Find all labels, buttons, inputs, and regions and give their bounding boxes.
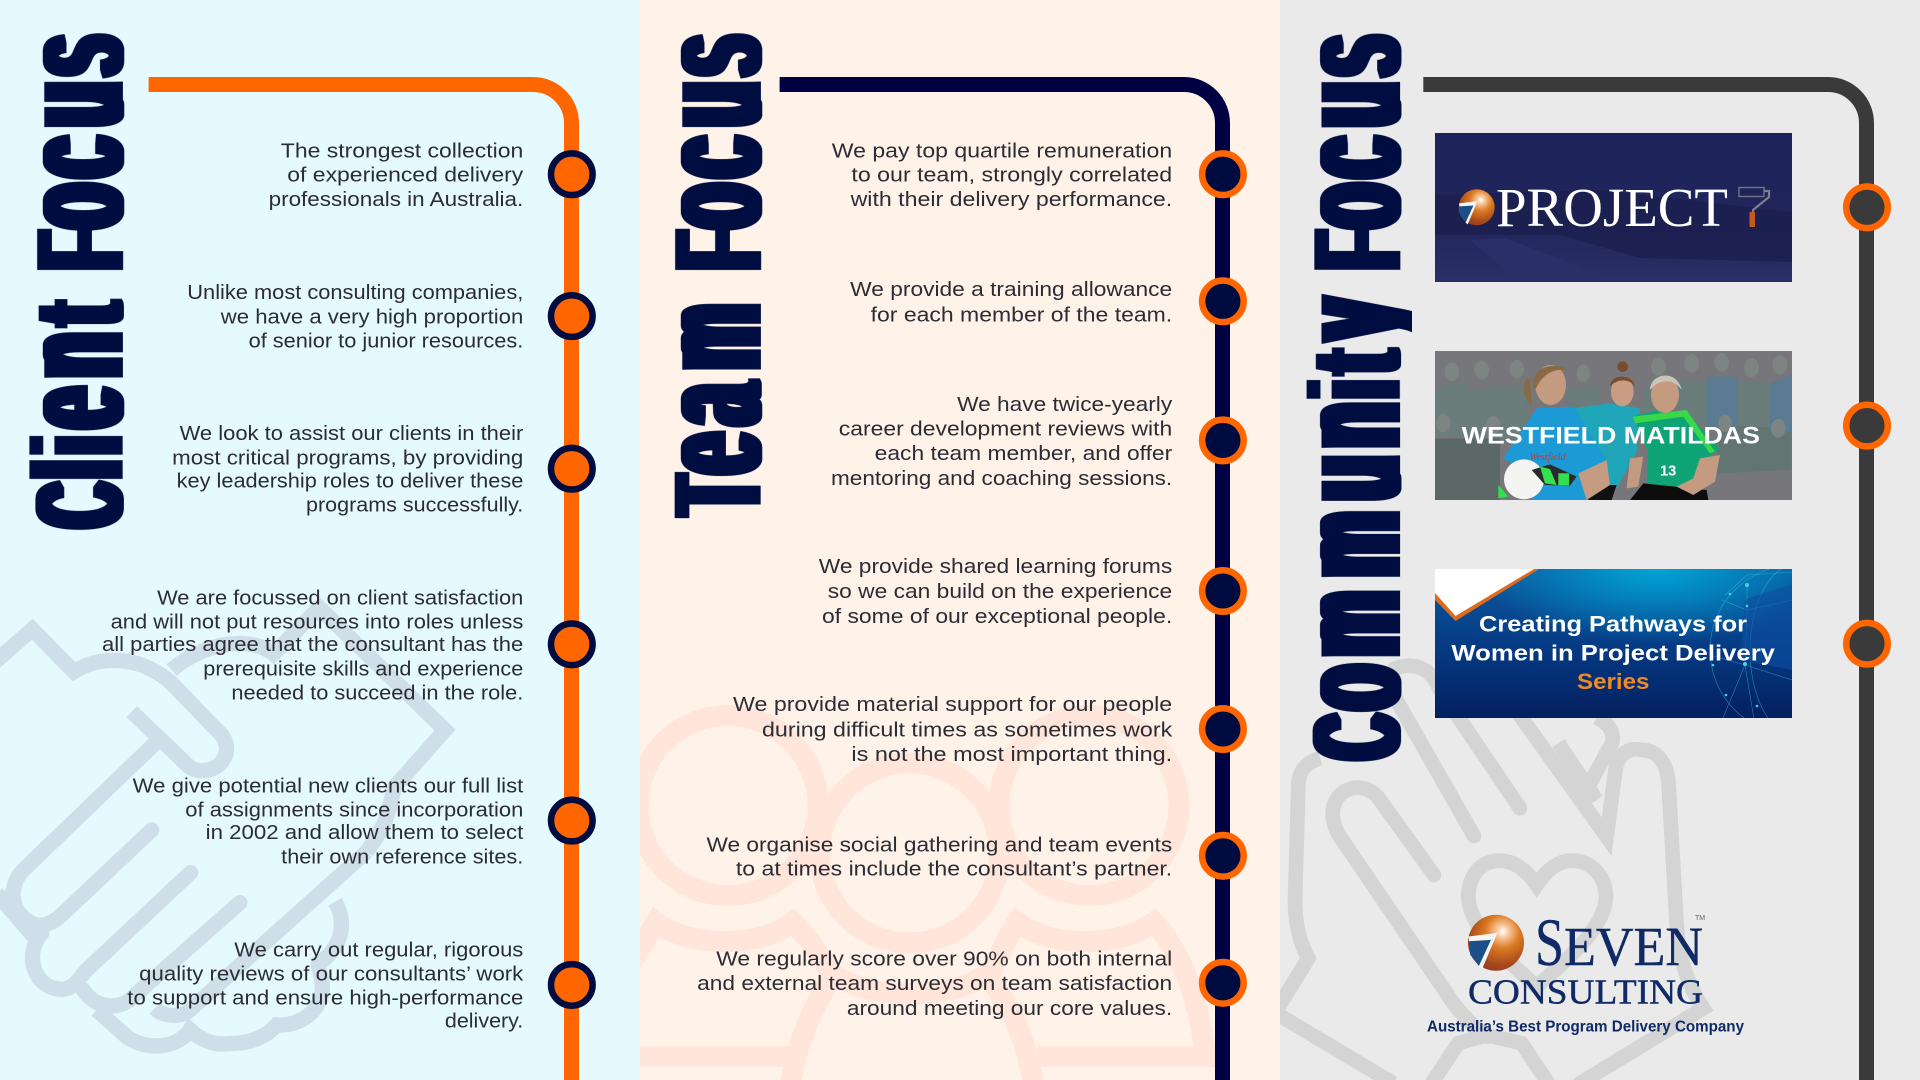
logo wordmark: S [1535,904,1564,980]
logo: Seven Consulting [1427,904,1744,1036]
player: green: 13 [1660,464,1676,480]
heading: Community Focus: it [1286,351,1427,398]
player: teal [1573,361,1640,500]
panel: community focus [1267,0,1920,1080]
text: training allowance [850,279,1172,326]
text: social gathering: We organise social gathering and team events [706,834,1172,856]
heading: Community Focus: F [1288,231,1426,269]
text: quality reviews: quality reviews of our consultants’ work [139,963,524,985]
text: quality reviews: We carry out regular, rigorous [234,939,523,961]
panel: team focus [628,0,1280,1080]
player: green [1627,376,1720,500]
heading: Community Focus: ocus [1267,36,1431,228]
text: team surveys: around meeting our core values. [847,998,1172,1020]
logo: orange globe [1459,189,1495,225]
timeline nodes: team [1202,153,1244,1004]
text: team surveys: We regularly score over 90% on both internal [716,948,1172,970]
heading: Community Focus [1306,33,1412,762]
text blocks: client points [102,140,524,1032]
text: material support [733,694,1173,766]
banner text: Women in Project Delivery [1451,640,1776,666]
banner text: Creating Pathways for [1479,611,1748,636]
heading: Team Focus: ocus [628,35,792,229]
banner text: Series [1577,669,1649,694]
network globe [1710,569,1792,718]
text: client satisfaction: needed to succeed in the role. [231,682,523,704]
timeline nodes: community [1846,186,1888,664]
heading: Client Focus: C [11,483,149,527]
timeline line: community [1423,84,1866,1080]
icon: paint roller 7 [1739,188,1769,227]
text: career reviews: mentoring and coaching sessions. [831,468,1172,490]
text: high proportion of senior: Unlike most consulting companies, [187,282,523,304]
text: full list of assignments: of assignments since incorporation [185,800,523,822]
text blocks: team points [697,140,1173,1020]
text: material support: is not the most important thing. [851,744,1172,766]
heading: Community Focus: ommun [1267,403,1431,710]
text: critical programs [172,423,524,516]
text: learning forums: We provide shared learning forums [819,556,1172,578]
text: full list of assignments: We give potential new clients our full list [133,775,524,797]
heading: Community Focus: y [1267,299,1431,339]
white corner with orange edge [1435,569,1539,621]
heading: Team Focus [628,35,792,514]
icon: caring hands watermark [1275,666,1703,1080]
text: remuneration: We pay top quartile remuneration [832,140,1172,162]
text: full list of assignments: in 2002 and allow them to select [206,822,524,844]
panel: client focus [0,0,640,1080]
text: quality reviews: delivery. [445,1010,523,1032]
text: critical programs: programs successfully. [306,494,523,516]
text: client satisfaction: and will not put resources into roles unless [111,612,523,634]
text: remuneration: to our team, strongly correlated [851,164,1172,186]
text: client satisfaction: all parties agree that the consultant has the [102,634,523,656]
text: strongest collection: The strongest collection [281,140,523,162]
heading: Client Focus: t [9,303,150,324]
logo wordmark: CONSULTING [1468,972,1703,1011]
text: learning forums: so we can build on the experience [828,581,1172,603]
text: remuneration: with their delivery performance. [849,189,1172,211]
text: high proportion of senior [187,282,523,352]
player: blue goalkeeper: Westfield [1529,452,1567,463]
text: critical programs: most critical programs, by providing [172,448,523,470]
text: strongest collection [269,140,523,211]
text: strongest collection: professionals in Australia. [269,189,523,211]
logo wordmark: TM [1695,915,1705,922]
text: training allowance: We provide a training allowance [850,279,1172,301]
image card: Project 7 [1435,133,1792,282]
image card: Creating Pathways banner [1435,569,1792,718]
heading: Team Focus: eam [628,304,792,474]
text: critical programs: We look to assist our clients in their [180,423,524,445]
heading: Client Focus [0,35,154,527]
heading: Client Focus: li [9,436,150,478]
text: remuneration [832,140,1172,211]
timeline nodes: client [551,153,593,1006]
text: critical programs: key leadership roles to deliver these [177,470,523,492]
heading: Client Focus: F [11,232,149,269]
text: career reviews [831,394,1173,490]
text: career reviews: career development reviews with [839,418,1172,440]
heading: Team Focus: F [649,232,787,269]
text: quality reviews: to support and ensure high-performance [127,988,523,1010]
logo text: PROJECT: PROJECT [1496,177,1728,238]
text: training allowance: for each member of the team. [871,304,1172,326]
heading: Community Focus: C [1288,715,1426,759]
text: team surveys [697,948,1172,1020]
text: learning forums: of some of our exceptional people. [822,606,1172,628]
text: high proportion of senior: we have a very high proportion [220,306,523,328]
image heading: WESTFIELD MATILDAS: WESTFIELD MATILDAS [1462,422,1760,449]
text: client satisfaction [102,587,523,704]
timeline line: team [780,84,1222,1080]
text: career reviews: We have twice-yearly [957,394,1172,416]
text: client satisfaction: We are focussed on client satisfaction [157,587,523,609]
text: full list of assignments: their own reference sites. [281,846,523,868]
faded team photo [1435,353,1792,500]
text: material support: during difficult times as sometimes work [762,719,1173,741]
image card: Westfield Matildas [1435,351,1792,500]
text: social gathering: to at times include the consultant’s partner. [736,858,1172,880]
text: material support: We provide material support for our people [733,694,1172,716]
icon: handshake watermark [0,608,445,1046]
player: blue goalkeeper [1498,365,1610,500]
text: client satisfaction: prerequisite skills and experience [203,658,523,680]
text: strongest collection: of experienced delivery [287,164,523,186]
text: learning forums [819,556,1172,628]
text: quality reviews [127,939,524,1032]
logo wordmark: EVEN [1564,916,1703,977]
text: team surveys: and external team surveys on team satisfaction [697,973,1172,995]
logo tagline: Australia’s Best Program Delivery Company [1427,1019,1744,1036]
text: full list of assignments [133,775,524,868]
icon: team people watermark [630,716,1205,1080]
heading: Team Focus: T [649,476,787,514]
banner text [1451,616,1775,689]
logo wordmark [1468,904,1705,1011]
text: social gathering [706,834,1172,880]
text: high proportion of senior: of senior to junior resources. [249,330,523,352]
players [1498,361,1720,500]
logo mark: globe [1468,915,1524,971]
text: career reviews: each team member, and offer [875,443,1173,465]
timeline line: client [149,84,572,1080]
